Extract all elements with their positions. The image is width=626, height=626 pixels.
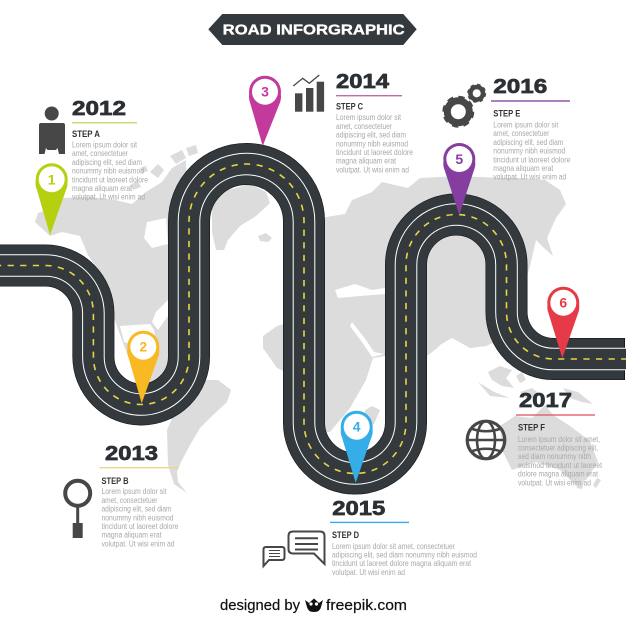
- step A text: Lorem ipsum dolor sit: [72, 140, 138, 150]
- pin 6: [547, 287, 579, 358]
- title banner: [208, 14, 417, 45]
- winding road: [0, 164, 626, 474]
- step A text: STEP A: [72, 129, 101, 139]
- step E text: 2016: [493, 76, 547, 98]
- step F text: consectetuer adipiscing elit,: [518, 444, 598, 452]
- step E text: Lorem ipsum dolor sit: [493, 120, 559, 130]
- step C text: magna aliquam erat: [336, 157, 397, 166]
- step E text: tincidunt ut laoreet dolore: [493, 155, 571, 164]
- step D text: volutpat. Ut wisi enim ad: [332, 568, 405, 577]
- step F text: [516, 390, 603, 487]
- step A text: amet, consectetuer: [72, 149, 128, 158]
- step D text: [330, 498, 477, 577]
- pin 1: [36, 163, 68, 235]
- step B text: volutpat. Ut wisi enim ad: [102, 539, 174, 548]
- step C text: 2014: [336, 71, 390, 93]
- step B text: nonummy nibh euismod: [102, 513, 174, 522]
- step B text: amet, consectetuer: [102, 496, 158, 505]
- step A text: magna aliquam erat: [72, 184, 133, 193]
- step C text: adipiscing elit, sed diam: [336, 131, 406, 140]
- step D text: Lorem ipsum dolor sit amet, consectetuer: [332, 542, 455, 551]
- title banner: ROAD INFORGRAPHIC: [223, 22, 405, 38]
- pin 5: [443, 143, 475, 215]
- step A text: nonummy nibh euismod: [72, 167, 144, 176]
- step C text: volutpat. Ut wisi enim ad: [336, 165, 409, 174]
- pin 3: 3: [261, 84, 269, 100]
- pin 4: 4: [353, 419, 361, 435]
- step E text: nonummy nibh euismod: [493, 147, 565, 156]
- icon: gears: [444, 85, 485, 126]
- step E text: magna aliquam erat: [493, 164, 554, 173]
- icon: globe: [467, 421, 505, 459]
- step F text: euismod tincidunt ut laoreet: [518, 461, 603, 470]
- step B text: [100, 443, 179, 548]
- step F text: sed diam nonummy nibh: [518, 452, 591, 461]
- step A text: [72, 98, 148, 202]
- step C text: tincidunt ut laoreet dolore: [336, 148, 413, 157]
- step F text: 2017: [519, 390, 572, 412]
- icon: person: [39, 106, 65, 154]
- step D text: 2015: [332, 498, 385, 520]
- step E text: STEP E: [493, 108, 520, 118]
- step F text: volutpat. Ut wisi enim ad: [518, 478, 591, 487]
- step C text: STEP C: [336, 102, 364, 112]
- pin 1: 1: [48, 171, 56, 187]
- pin 2: 2: [139, 339, 147, 355]
- step F text: STEP F: [518, 423, 546, 433]
- pin 6: 6: [559, 295, 567, 311]
- pin 2: [127, 331, 159, 403]
- icon: magnifier: [65, 481, 90, 538]
- pin 3: [249, 76, 281, 146]
- icon: speech bubbles: [264, 532, 324, 566]
- step A text: 2012: [72, 98, 126, 120]
- step B text: tincidunt ut laoreet dolore: [102, 522, 179, 531]
- step B text: Lorem ipsum dolor sit: [102, 487, 167, 496]
- footer credit: [220, 598, 407, 614]
- step D text: tincidunt ut laoreet dolore magna aliquam erat: [332, 559, 472, 568]
- step E text: volutpat. Ut wisi enim ad: [493, 173, 566, 182]
- step E text: adipiscing elit, sed diam: [493, 138, 564, 147]
- step A text: adipiscing elit, sed diam: [72, 158, 142, 167]
- icon: bar chart: [293, 75, 324, 112]
- step D text: adipiscing elit, sed diam nonummy nibh euismod: [332, 550, 477, 560]
- step A text: tincidunt ut laoreet dolore: [72, 175, 148, 184]
- step B text: magna aliquam erat: [102, 531, 162, 540]
- step C text: nonummy nibh euismod: [336, 139, 408, 148]
- step F text: dolore magna aliquam erat: [518, 470, 599, 479]
- pin 4: [341, 411, 373, 483]
- step E text: amet, consectetuer: [493, 129, 550, 138]
- step C text: Lorem ipsum dolor sit: [336, 113, 402, 122]
- step C text: amet, consectetuer: [336, 122, 392, 131]
- step D text: STEP D: [332, 530, 359, 540]
- footer credit: freepik.com: [326, 598, 407, 614]
- step B text: 2013: [105, 443, 158, 465]
- footer credit: designed by: [220, 598, 301, 614]
- step B text: adipiscing elit, sed diam: [102, 505, 172, 514]
- step C text: [336, 71, 413, 174]
- step E text: [491, 76, 571, 182]
- step A text: volutpat. Ut wisi enim ad: [72, 193, 145, 202]
- step B text: STEP B: [102, 476, 128, 486]
- step F text: Lorem ipsum dolor sit amet,: [518, 435, 600, 444]
- pin 5: 5: [455, 151, 463, 167]
- world map background: [35, 145, 601, 493]
